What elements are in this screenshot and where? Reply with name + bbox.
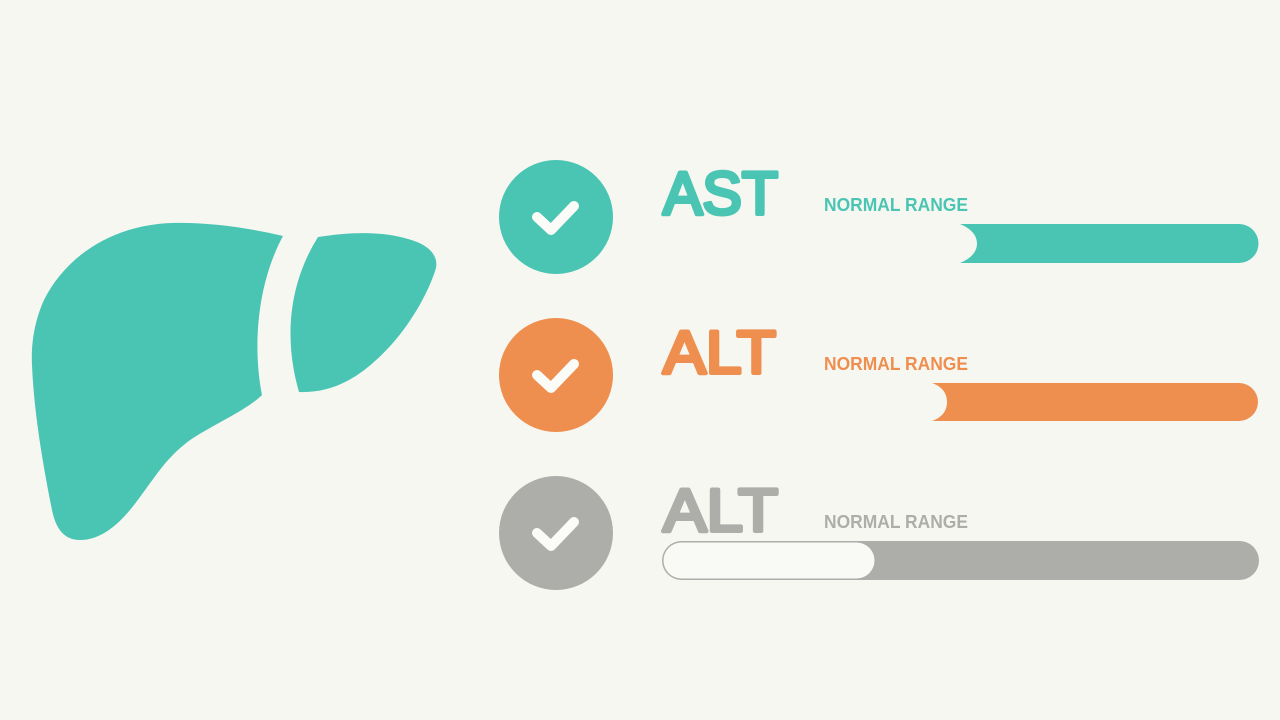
- range bar: grey: [662, 541, 1259, 580]
- row: ALT grey: [499, 476, 1259, 590]
- row: AST: [499, 160, 1259, 274]
- label: normal range: NORMAL RANGE: [824, 195, 968, 215]
- label: normal range: NORMAL RANGE: [824, 512, 968, 532]
- heading: ALT: ALT: [663, 319, 776, 386]
- heading: ALT: ALT: [663, 477, 778, 544]
- range bar: orange: [932, 383, 1258, 421]
- icon: orange check badge: [499, 318, 613, 432]
- icon: liver: [32, 223, 436, 540]
- icon: teal check badge: [499, 160, 613, 274]
- icon: grey check badge: [499, 476, 613, 590]
- range bar: teal: [960, 224, 1259, 263]
- row: ALT orange: [499, 318, 1258, 432]
- heading: AST: AST: [663, 160, 778, 227]
- liver right lobe: [291, 233, 436, 392]
- liver left lobe: [32, 223, 283, 540]
- label: normal range: NORMAL RANGE: [824, 354, 968, 374]
